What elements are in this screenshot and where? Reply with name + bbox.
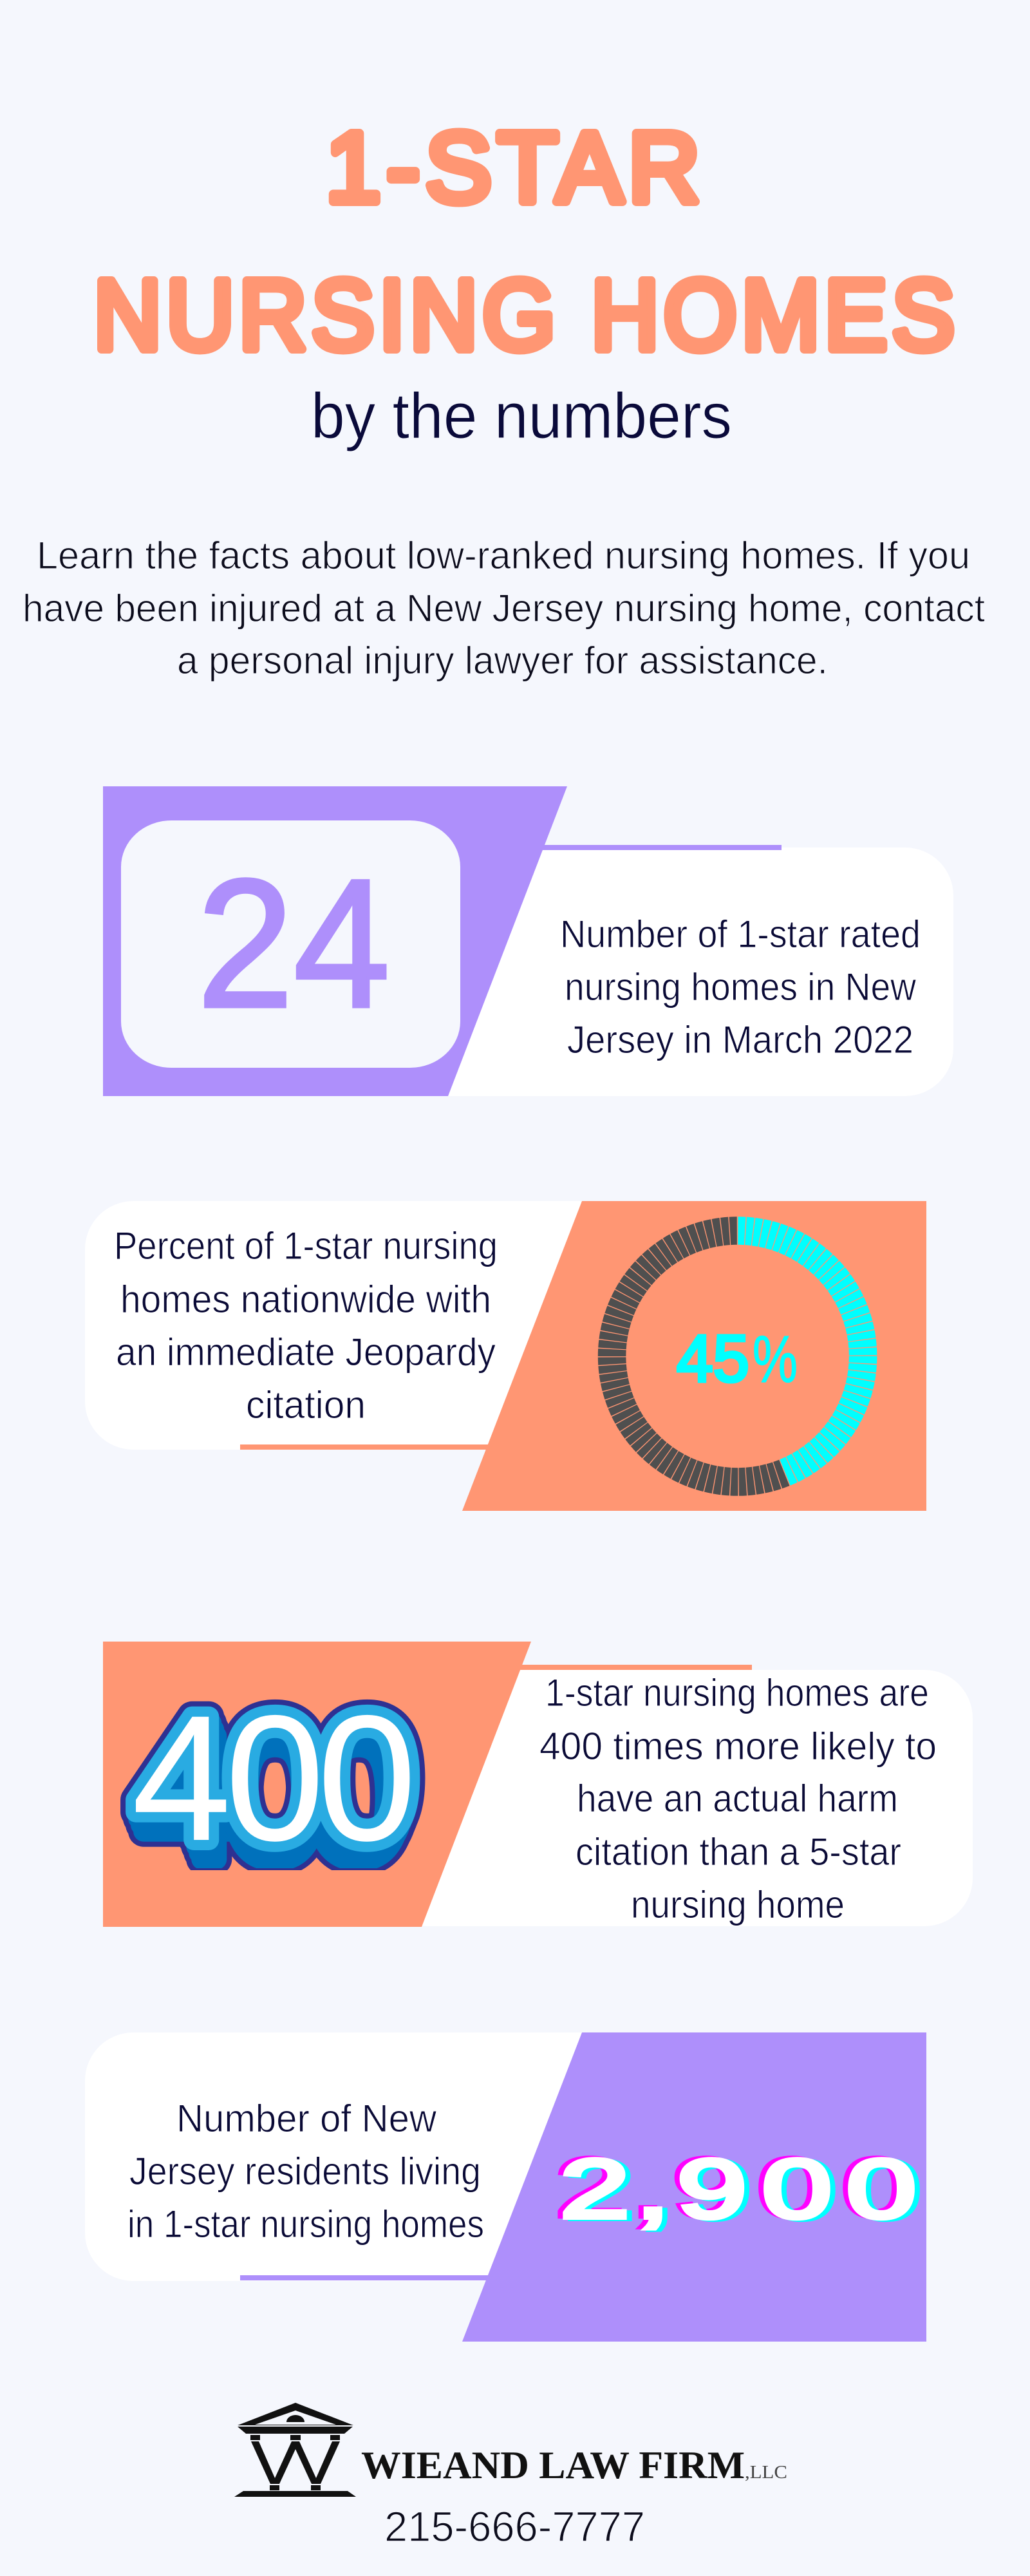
number box — [121, 820, 460, 1068]
description — [114, 1224, 498, 1426]
intro text block: Learn the facts about low-ranked nursing homes. If you — [37, 534, 970, 577]
text card — [380, 1670, 973, 1926]
accent bar — [240, 2275, 510, 2280]
phone number: 215-666-7777 — [384, 2503, 645, 2550]
description: Percent of 1-star nursing — [114, 1224, 498, 1267]
description: 400 times more likely to — [539, 1725, 937, 1768]
panel: 45 percent — [85, 1201, 926, 1511]
footer logo — [234, 2403, 787, 2550]
orange block — [462, 1201, 926, 1511]
big number 400: 400 — [132, 1678, 417, 1878]
ring value — [677, 1321, 798, 1396]
text card — [85, 1201, 729, 1450]
big number 2,900: 2,900 — [555, 2141, 911, 2235]
accent bar — [515, 1665, 752, 1670]
description: citation — [246, 1383, 366, 1426]
orange block — [103, 1642, 531, 1927]
firm name: WIEAND LAW FIRM — [361, 2444, 745, 2486]
description: nursing homes in New — [565, 965, 917, 1009]
purple block — [103, 786, 567, 1096]
intro text block: have been injured at a New Jersey nursing home, contact — [23, 587, 985, 630]
intro text block: a personal injury lawyer for assistance. — [177, 639, 828, 682]
description: nursing home — [631, 1883, 845, 1926]
panel: 24 homes — [103, 786, 953, 1096]
big number 400: 400 — [137, 1690, 411, 1891]
description: Jersey residents living — [129, 2150, 481, 2193]
big number 400: 400 — [132, 1678, 417, 1878]
title: NURSING HOMES — [94, 259, 959, 370]
description — [560, 913, 921, 1061]
big number 400: 400 — [132, 1678, 417, 1878]
panel: 2,900 residents — [85, 2032, 926, 2342]
big number 2,900: 2,900 — [565, 2144, 921, 2237]
description: Number of New — [176, 2097, 437, 2140]
text card — [258, 848, 953, 1096]
description: 1-star nursing homes are — [545, 1671, 929, 1714]
big number 400: 400 — [135, 1684, 414, 1884]
big number 400: 400 — [140, 1697, 408, 1897]
accent bar — [534, 845, 782, 850]
description — [127, 2097, 484, 2246]
icon: temple W — [234, 2403, 356, 2497]
text card — [85, 2032, 729, 2281]
description: Number of 1-star rated — [560, 913, 921, 956]
description: homes nationwide with — [120, 1278, 491, 1321]
intro text block — [23, 534, 985, 682]
big number 2,900: 2,900 — [560, 2143, 916, 2236]
ring value: % — [753, 1322, 798, 1396]
big number 400: 400 — [140, 1697, 408, 1897]
panel: 400 times — [103, 1642, 973, 1927]
description: an immediate Jeopardy — [116, 1331, 496, 1374]
big number 24: 24 — [197, 842, 390, 1046]
description: in 1-star nursing homes — [127, 2202, 484, 2246]
description: have an actual harm — [577, 1777, 898, 1820]
description: citation than a 5-star — [576, 1830, 901, 1873]
big number 400: 400 — [137, 1690, 411, 1891]
title — [94, 112, 959, 370]
ring value: 45 — [677, 1321, 749, 1396]
description: Jersey in March 2022 — [567, 1018, 913, 1061]
accent bar — [240, 1444, 510, 1450]
subtitle: by the numbers — [311, 380, 732, 452]
purple block — [462, 2032, 926, 2342]
ring chart 45 percent — [612, 1231, 863, 1482]
description — [539, 1671, 937, 1926]
big number 400: 400 — [135, 1684, 414, 1884]
title: 1-STAR — [326, 112, 706, 223]
LLC: ,LLC — [745, 2463, 787, 2483]
